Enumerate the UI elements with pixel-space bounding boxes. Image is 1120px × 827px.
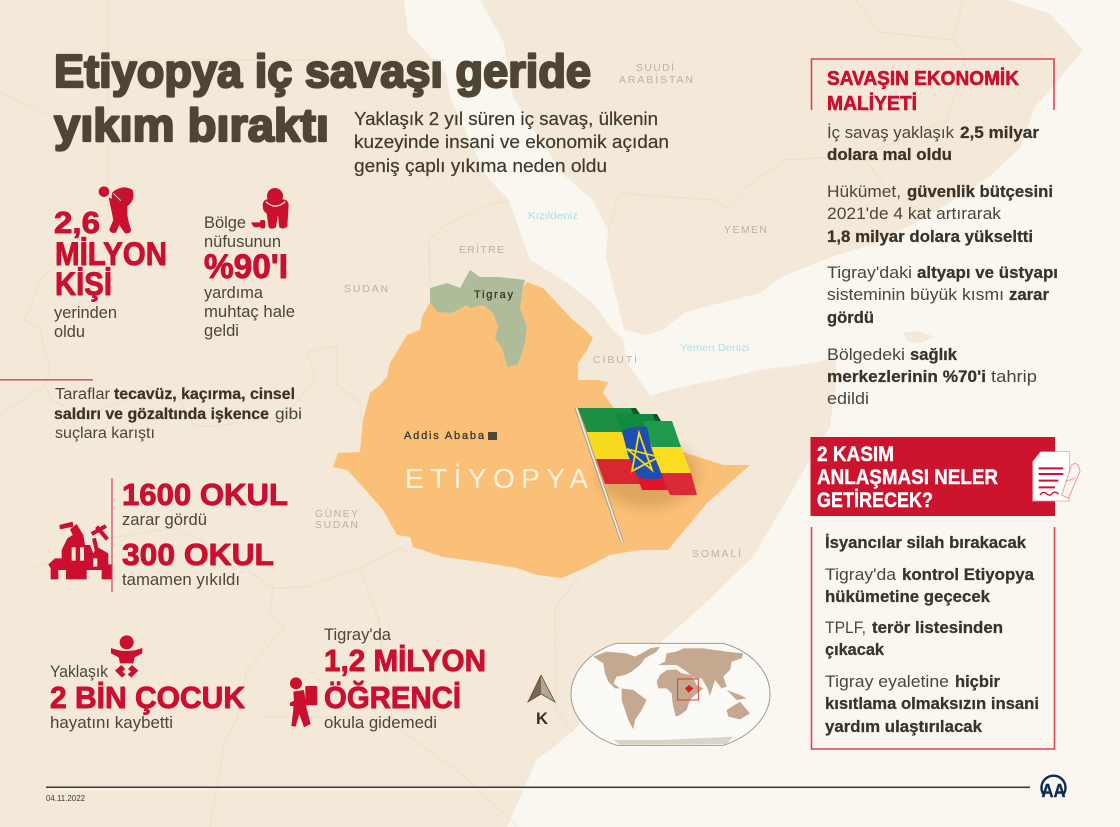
text: health centres: tahrip (991, 368, 1037, 386)
logo: AA: AA (1042, 781, 1066, 801)
icon: seated person with bowl (251, 188, 289, 229)
stat: 2,6 milyon displaced: 2,6 (54, 205, 100, 240)
locator world map (571, 643, 770, 745)
map: Tigray region (430, 270, 527, 367)
text: security budget: 2021'de 4 kat artırarak (827, 205, 1002, 223)
text: disarmament: İsyancılar silah bırakacak (825, 534, 1027, 552)
text: cost: İç savaş yaklaşık (827, 123, 955, 142)
icon: baby (111, 635, 142, 678)
subtitle: geniş çaplı yıkıma neden oldu (354, 156, 607, 176)
stat: 1.2 million students: okula gidemedi (324, 714, 437, 732)
text: TPLF: çıkacak (825, 641, 885, 659)
text block: crimes: gibi (275, 406, 302, 423)
text block: crimes: Taraflar (55, 386, 110, 403)
stat: 2 thousand children (50, 635, 246, 732)
map labels: country and sea names: Kızıldeniz (528, 210, 578, 222)
map labels: country and sea names: SUDAN (344, 283, 388, 295)
text: infrastructure: gördü (827, 309, 874, 327)
panel: 2 November agreement header (810, 437, 1080, 516)
subtitle: kuzeyinde insani ve ekonomik açıdan (354, 132, 669, 152)
footer rule (46, 786, 1030, 790)
text: cost: dolara mal oldu (827, 146, 952, 164)
text: health centres (827, 346, 1037, 408)
title: yıkım bıraktı (54, 99, 329, 151)
heading: economic cost: SAVAŞIN EKONOMİK (827, 67, 1020, 90)
text: infrastructure: Tigray'daki (827, 264, 912, 282)
stat: schools damaged: 300 OKUL (122, 537, 274, 572)
text: security budget: güvenlik bütçesini (907, 183, 1053, 201)
heading: agreement: GETİRECEK? (817, 489, 933, 512)
map labels: country and sea names: SUUDİ (636, 61, 674, 74)
text: infrastructure: zarar (1009, 286, 1050, 304)
text: control: Tigray'da (825, 566, 897, 584)
map labels: country and sea names: GÜNEY (315, 508, 358, 520)
stat: 2 thousand children: hayatını kaybetti (50, 714, 173, 732)
text: security budget: Hükümet, (827, 183, 901, 201)
text: control: kontrol Etiyopya (902, 566, 1035, 584)
heading: agreement (817, 443, 998, 512)
icon: person carrying sack (99, 186, 134, 233)
text: infrastructure: sisteminin büyük kısmı (827, 286, 1004, 304)
map labels: country and sea names: ERİTRE (459, 243, 504, 256)
map labels: country and sea names: Yemen Denizi (680, 342, 749, 354)
heading: agreement: ANLAŞMASI NELER (817, 466, 998, 489)
icon: north compass: K (536, 709, 549, 728)
stat: 1.2 million students: 1,2 MİLYON (324, 643, 486, 678)
title: Etiyopya iç savaşı geride (54, 45, 591, 97)
stat: 2,6 milyon displaced (54, 186, 167, 341)
stat: 90% need aid: geldi (204, 322, 239, 340)
footer date: 04.11.2022 (46, 793, 85, 803)
heading: economic cost: MALİYETİ (827, 92, 917, 115)
text: cost: 2,5 milyar (960, 124, 1040, 142)
text: control: hükümetine geçecek (825, 588, 991, 606)
stat: schools damaged: tamamen yıkıldı (122, 571, 240, 589)
text block: crimes: saldırı ve gözaltında işkence (54, 406, 269, 423)
stat: 2 thousand children: 2 BİN ÇOCUK (50, 680, 246, 715)
text block: crimes: tecavüz, kaçırma, cinsel (114, 386, 295, 403)
map labels: country and sea names: CİBUTİ (593, 353, 637, 366)
stat: schools damaged: 1600 OKUL (122, 477, 288, 512)
icon: signed document (1033, 452, 1080, 501)
text block: crimes: suçlara karıştı (55, 425, 155, 442)
map labels: country and sea names: ARABİSTAN (619, 73, 693, 86)
stat: 1.2 million students: ÖĞRENCİ (324, 680, 461, 715)
stat: 1.2 million students: Tigray'da (324, 626, 392, 644)
map label: ETİYOPYA: ETİYOPYA (405, 463, 588, 494)
subtitle: Yaklaşık 2 yıl süren iç savaş, ülkenin (354, 109, 658, 129)
map label: Tigray: Tigray (474, 289, 514, 301)
text: security budget: 1,8 milyar dolara yükseltti (827, 228, 1033, 246)
map labels: country and sea names: SOMALİ (692, 547, 741, 560)
subtitle (354, 109, 669, 176)
stat: 1.2 million students (290, 626, 486, 732)
text: infrastructure: altyapı ve üstyapı (917, 264, 1058, 282)
stat: 2,6 milyon displaced: MİLYON (55, 236, 167, 272)
map label: Addis Ababa: Addis Ababa (404, 430, 485, 442)
stat: 2 thousand children: Yaklaşık (50, 663, 109, 681)
text: health centres: sağlık (910, 346, 958, 364)
stat: 2,6 milyon displaced: KİŞİ (55, 266, 112, 302)
stat: 90% need aid: muhtaç hale (204, 303, 295, 321)
text: TPLF: TPLF, (825, 619, 866, 637)
text: aid: yardım ulaştırılacak (825, 718, 983, 736)
map: Ethiopia (333, 282, 750, 578)
text: infrastructure (827, 264, 1058, 327)
stat: 90% need aid: yardıma (204, 284, 264, 302)
text: TPLF (825, 619, 1003, 659)
stat: 90% need aid (204, 188, 295, 340)
map labels: country and sea names: SUDAN (315, 519, 358, 531)
text: TPLF: terör listesinden (872, 619, 1003, 637)
stat: 90% need aid: Bölge (204, 214, 246, 232)
panel: economic cost (812, 59, 1058, 408)
stat: 90% need aid: nüfusunun (204, 233, 281, 251)
text: aid: kısıtlama olmaksızın insani (825, 695, 1039, 713)
heading: agreement: 2 KASIM (817, 443, 894, 466)
stat: schools damaged (48, 477, 288, 592)
map labels: country and sea names: YEMEN (724, 224, 767, 236)
stat: 2,6 milyon displaced: oldu (54, 323, 85, 341)
text: aid (825, 673, 1039, 736)
text block: crimes (54, 386, 302, 442)
stat: 2,6 milyon displaced: yerinden (54, 304, 117, 322)
stat: 90% need aid: %90'I (204, 248, 288, 286)
text: health centres: merkezlerinin %70'i (827, 368, 986, 386)
text: aid: Tigray eyaletine (825, 673, 949, 691)
title (54, 45, 591, 151)
icon: destroyed school (48, 522, 112, 579)
divider accent (0, 379, 93, 381)
icon: north compass (528, 675, 555, 728)
panel: agreement terms (812, 527, 1054, 749)
icon: Ethiopian flag (576, 407, 698, 542)
text: aid: hiçbir (955, 673, 1001, 691)
text: control (825, 566, 1035, 606)
text: security budget (827, 183, 1053, 246)
text: health centres: edildi (827, 390, 869, 408)
icon: student with backpack (290, 677, 317, 727)
map labels: country and sea names (315, 61, 767, 560)
stat: schools damaged: zarar gördü (122, 511, 207, 529)
heading: economic cost (827, 67, 1020, 115)
text: health centres: Bölgedeki (827, 346, 905, 364)
text: cost (827, 123, 1040, 164)
